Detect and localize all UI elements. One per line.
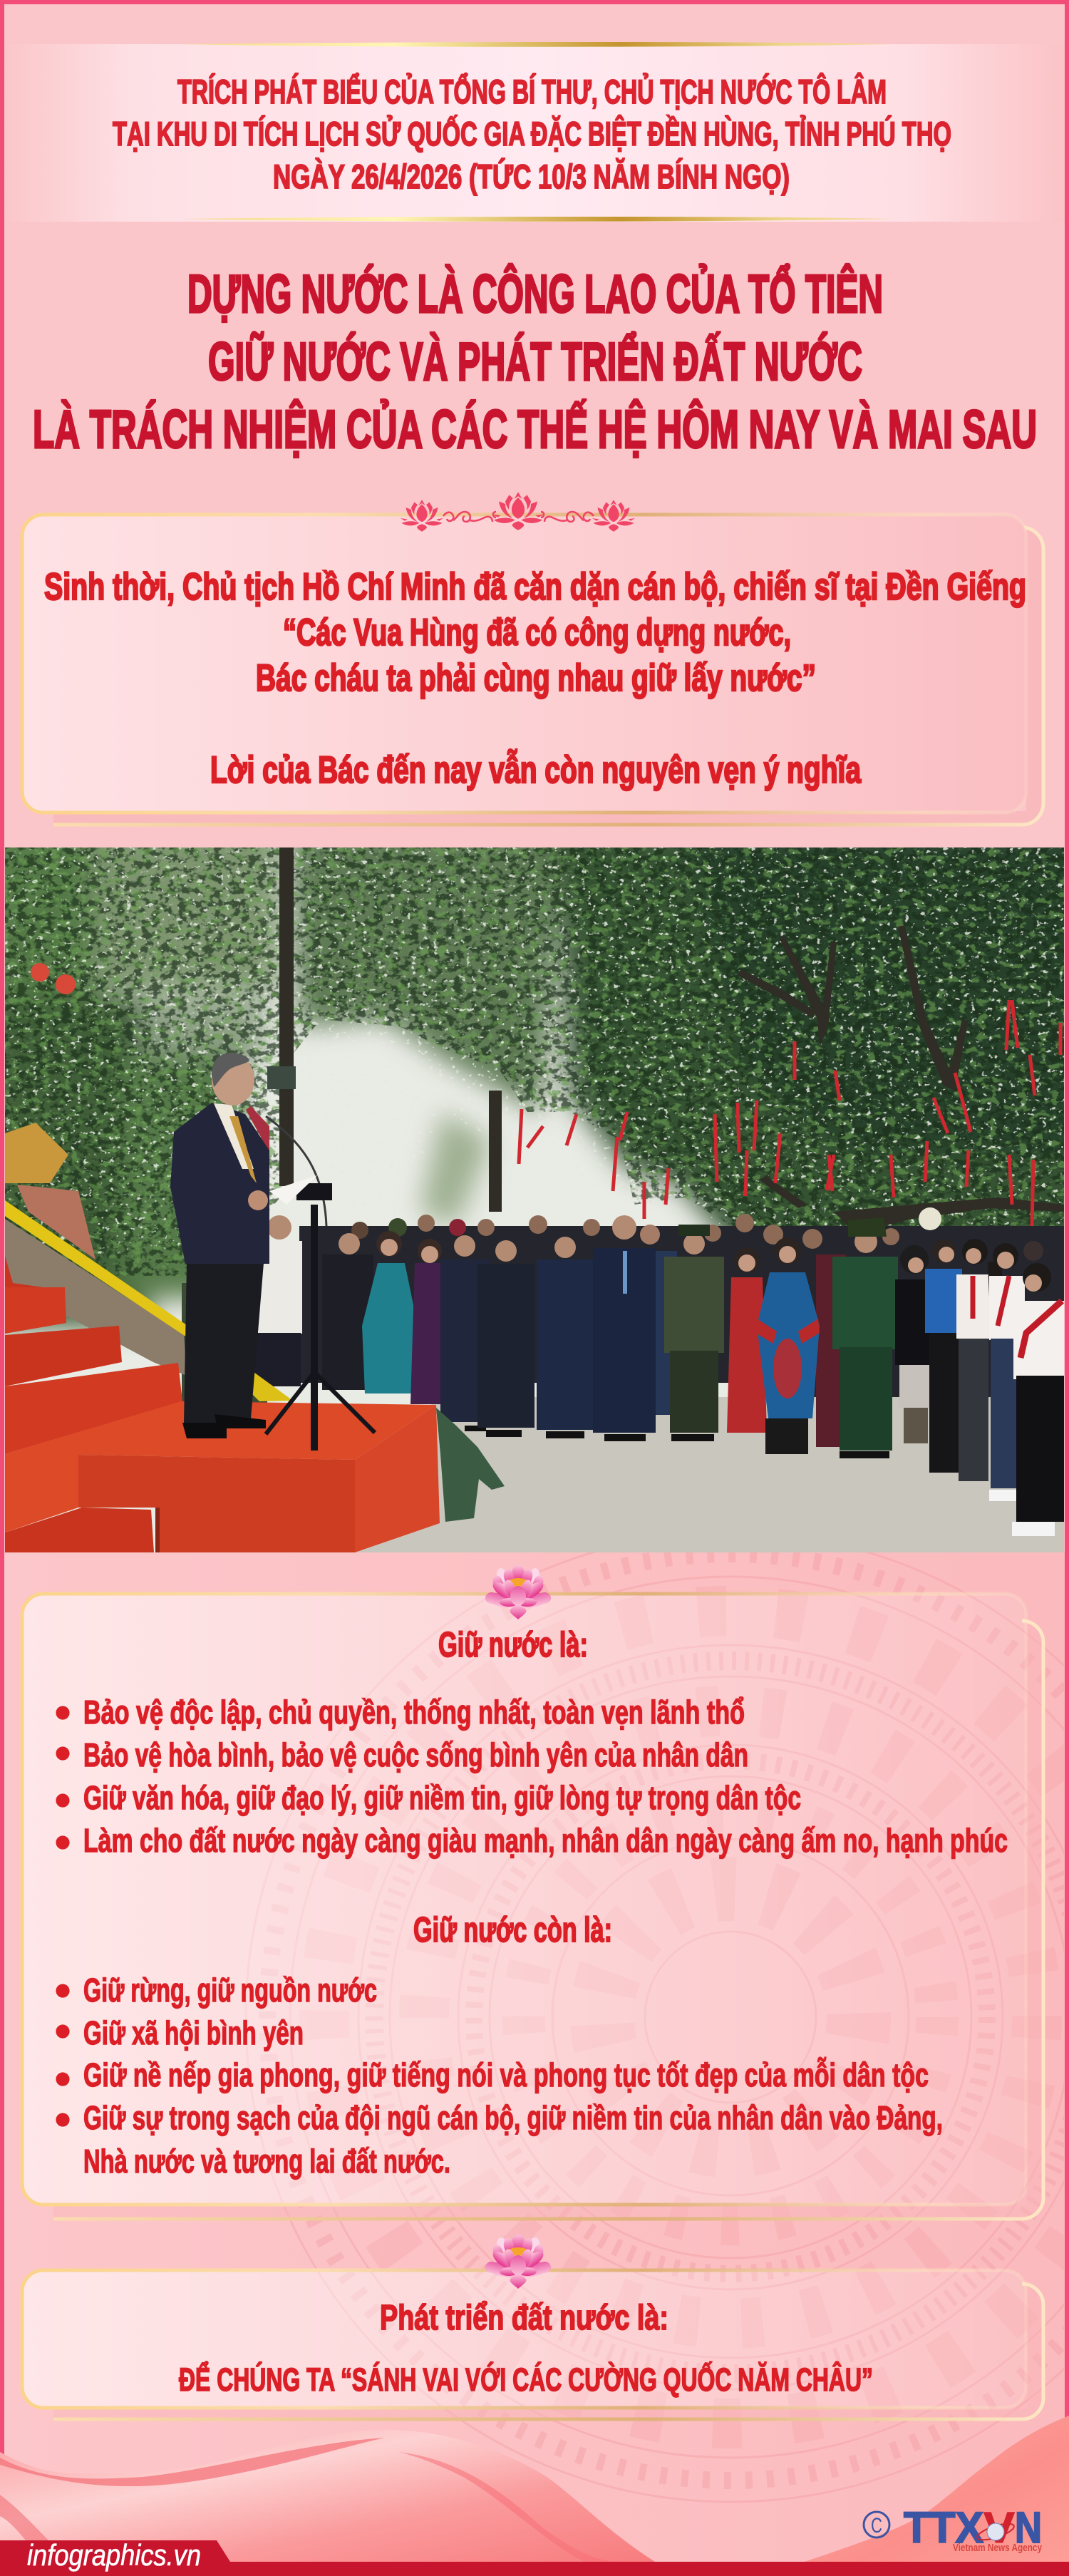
person: white shirt man	[254, 1215, 302, 1386]
panel: Phát triển đất nước	[22, 2270, 1043, 2419]
person: general 2	[832, 1217, 898, 1458]
person: student girl front	[1012, 1263, 1065, 1536]
list: Giữ nước là: Bảo vệ hòa bình, bảo vệ cuộc sống bình yên của nhân dân	[83, 1736, 748, 1773]
speaker figure	[170, 1053, 317, 1438]
icon: lotus ornament	[401, 493, 635, 532]
decoration: silk ribbon left	[0, 2430, 655, 2562]
icon: lotus flower 1	[484, 1565, 552, 1619]
list: Giữ nước là	[56, 1694, 1008, 1859]
person: ethnic dress	[895, 1245, 934, 1443]
person: blue shirt	[925, 1239, 962, 1473]
header band	[4, 42, 1065, 222]
person: blue ao dai	[755, 1237, 820, 1454]
pavement	[335, 1397, 1064, 1552]
person: tall suit	[593, 1215, 656, 1441]
main title	[33, 264, 1037, 459]
heading: Giữ nước là: Giữ nước là:	[438, 1626, 588, 1664]
person: student boy	[989, 1243, 1025, 1501]
footer bar	[0, 2562, 1069, 2576]
heading: Phát triển đất nước là: Phát triển đất nước là:	[380, 2299, 668, 2337]
logo: TTXVN	[864, 2503, 1043, 2554]
quote text	[44, 566, 1026, 791]
photo: speaker and delegation at the Hung temple	[0, 827, 1069, 1552]
person: red dress	[727, 1247, 767, 1433]
delegation crowd	[254, 1207, 1065, 1536]
list: Giữ nước còn là: Nhà nước và tương lai đất nước.	[83, 2143, 450, 2180]
icon: lotus flower 2	[484, 2235, 552, 2289]
panel: Giữ nước	[22, 1594, 1043, 2219]
person: suit 5	[440, 1235, 489, 1431]
header text	[113, 73, 951, 195]
list: Giữ nước còn là: Giữ rừng, giữ nguồn nước	[83, 1972, 377, 2009]
footer tab: infographics.vn	[27, 2538, 201, 2572]
logo: TTXVN: V	[983, 2503, 1015, 2552]
person: dark suit	[322, 1233, 373, 1390]
lanterns	[31, 963, 76, 994]
person: general in green	[664, 1225, 724, 1441]
heading: Giữ nước còn là: Giữ nước còn là:	[413, 1911, 612, 1949]
quote text: Bác cháu ta phải cùng nhau giữ lấy nước”	[256, 657, 816, 699]
tree trunks and branches	[279, 847, 1064, 1233]
red ribbons	[519, 1000, 1060, 1227]
logo: TTXVN: N	[1015, 2503, 1042, 2552]
list: Giữ nước là: Bảo vệ độc lập, chủ quyền, thống nhất, toàn vẹn lãnh thổ	[83, 1694, 745, 1731]
trees: mottled leaves	[5, 847, 1064, 1276]
list: Giữ nước là: Giữ văn hóa, giữ đạo lý, giữ niềm tin, giữ lòng tự trọng dân tộc	[83, 1779, 801, 1816]
quote text: “Các Vua Hùng đã có công dựng nước,	[283, 612, 791, 654]
person: dark red robe	[816, 1254, 846, 1447]
person: suit 6	[477, 1240, 534, 1437]
flowers and planter	[5, 1123, 95, 1259]
person: purple ao dai	[410, 1239, 452, 1404]
microphone tripod	[266, 1116, 375, 1451]
background behind speaker	[182, 1283, 267, 1404]
person: suit 7	[537, 1237, 594, 1438]
person: student girl	[956, 1239, 1002, 1481]
loudspeaker	[267, 1066, 296, 1089]
logo: TTXVN: Vietnam News Agency	[953, 2542, 1043, 2554]
logo: TTXVN: TTX	[904, 2503, 983, 2552]
trees: broad tones	[0, 827, 1069, 1326]
list: Giữ nước còn là: Giữ xã hội bình yên	[83, 2014, 304, 2051]
panel: Ho Chi Minh quote	[22, 515, 1043, 825]
person: teal ao dai	[362, 1231, 418, 1393]
quote text: Lời của Bác đến nay vẫn còn nguyên vẹn ý nghĩa	[210, 748, 861, 791]
crowd backdrop	[299, 1226, 1064, 1397]
stairs and wall	[5, 1200, 440, 1552]
background pattern: bronze drum	[246, 1532, 1069, 2502]
person: suit 8	[640, 1225, 677, 1415]
back row of heads	[351, 1207, 1043, 1261]
potted fern	[436, 1408, 505, 1522]
header text: NGÀY 26/4/2026 (TỨC 10/3 NĂM BÍNH NGỌ)	[273, 158, 790, 195]
logo: TTXVN: C	[871, 2514, 882, 2538]
decoration: silk ribbon right	[805, 2416, 1069, 2562]
list: Giữ nước còn là	[56, 1972, 943, 2180]
